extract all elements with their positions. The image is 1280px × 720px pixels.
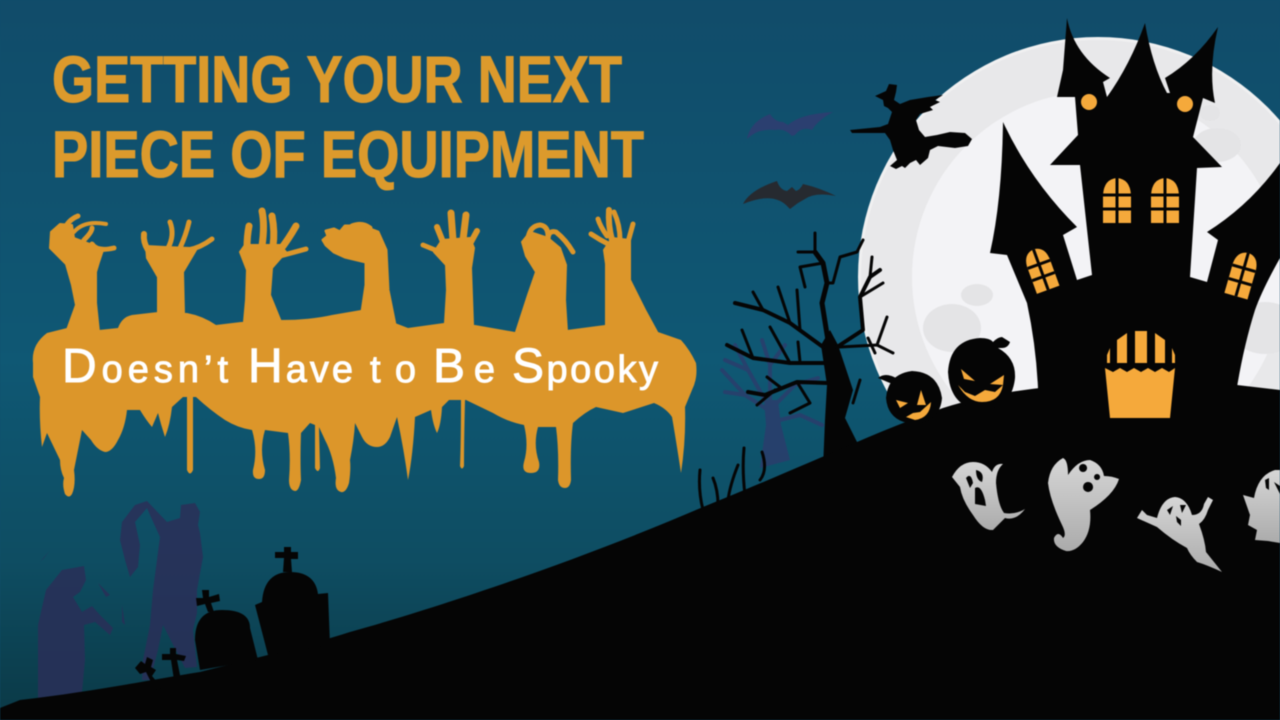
- zombie silhouette: tall: [120, 501, 203, 680]
- window mullions: [1022, 178, 1260, 299]
- banner text: to: [370, 349, 416, 391]
- small crosses: [135, 648, 186, 690]
- bat: faded purple: [747, 112, 833, 139]
- door: [1105, 331, 1175, 418]
- bat: dark: [743, 181, 836, 209]
- slime banner: [33, 310, 697, 496]
- gravestone: left: [195, 590, 258, 670]
- banner text: Have: [248, 340, 353, 393]
- pumpkin: small: [878, 371, 942, 424]
- zombie hand 1: [50, 216, 114, 332]
- banner text: Doesn’t: [62, 340, 228, 393]
- gravestone: right: [255, 547, 330, 655]
- moon: [858, 37, 1280, 517]
- haunted house: [990, 18, 1280, 420]
- grass tufts: [699, 448, 765, 510]
- ghost 1: [952, 462, 1025, 530]
- title: PIECE OF EQUIPMENT: [52, 117, 644, 191]
- house silhouette: [990, 18, 1280, 420]
- banner text: Be: [433, 340, 495, 393]
- zombie hand 2: [144, 222, 212, 315]
- zombie hand 5: [423, 213, 477, 325]
- ghost 3: [1137, 497, 1222, 572]
- zombie hand 4: [323, 224, 395, 325]
- banner text: [62, 340, 658, 393]
- tower lights: [1081, 94, 1193, 112]
- title: [52, 42, 644, 191]
- pumpkin: large: [948, 337, 1015, 410]
- witch on broom: [850, 84, 972, 169]
- banner text: Spooky: [512, 340, 658, 393]
- dripping banner with zombie hands: [33, 210, 697, 496]
- zombie hand 7: [591, 210, 657, 332]
- title: GETTING YOUR NEXT: [52, 42, 622, 116]
- zombie silhouette: crouched: [38, 550, 125, 698]
- hill: [0, 385, 1280, 720]
- zombie hand 6: [516, 225, 573, 332]
- zombie hand 3: [240, 211, 306, 322]
- purple background tree: [722, 340, 822, 468]
- ghost 4: [1243, 470, 1280, 543]
- ghost 2: [1048, 458, 1119, 551]
- arched windows: [1022, 178, 1260, 299]
- bare tree: [727, 233, 893, 468]
